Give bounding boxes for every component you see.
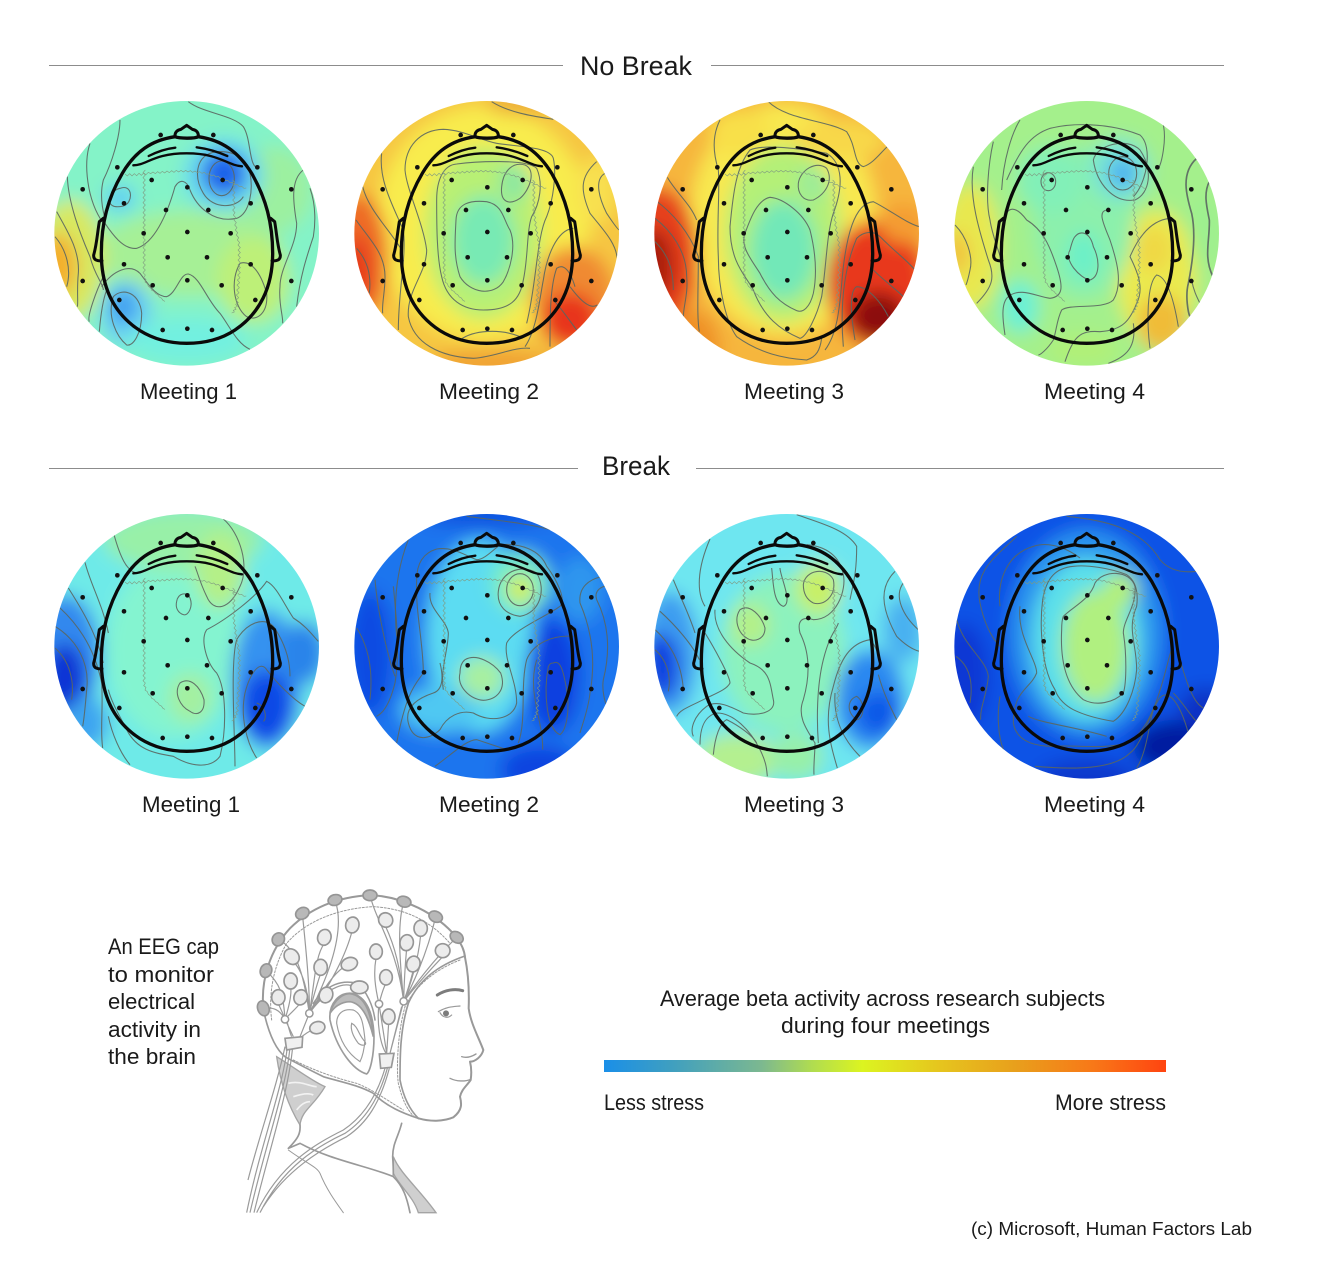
head outline and electrodes xyxy=(80,125,294,343)
contour lines xyxy=(356,102,619,358)
legend: stress colour scale xyxy=(604,1060,1166,1115)
colour field xyxy=(354,514,619,779)
copyright note: (c) Microsoft, Human Factors Lab xyxy=(971,1219,1252,1239)
text: EEG cap caption: to monitor xyxy=(108,962,214,987)
hair xyxy=(277,1057,436,1213)
colour field xyxy=(654,101,919,366)
contour lines xyxy=(55,519,318,766)
labels: Break meetings xyxy=(142,792,1145,817)
heat map: No Break, Meeting 3 xyxy=(654,101,919,366)
contour lines xyxy=(955,120,1213,363)
text: EEG cap caption: electrical xyxy=(108,989,195,1014)
text: chart description xyxy=(660,986,1105,1038)
colour field xyxy=(654,514,919,779)
labels: No Break meetings xyxy=(140,379,1145,404)
heat map: Break, Meeting 2 xyxy=(354,514,619,779)
heat map: No Break, Meeting 1 xyxy=(54,101,319,366)
labels: Break meetings: Meeting 3 xyxy=(744,792,844,817)
labels: Break meetings: Meeting 2 xyxy=(439,792,539,817)
contour lines xyxy=(55,102,315,349)
heat map: Break, Meeting 3 xyxy=(654,514,919,779)
contour lines xyxy=(655,515,919,776)
heat map: No Break, Meeting 4 xyxy=(954,101,1219,366)
cap and face outline xyxy=(263,895,483,1213)
labels: Break meetings: Meeting 1 xyxy=(142,792,240,817)
heading: No Break: No Break xyxy=(580,51,692,81)
heading: Break: Break xyxy=(602,451,670,481)
labels: No Break meetings: Meeting 4 xyxy=(1044,379,1145,404)
colour field xyxy=(954,514,1219,779)
contour lines xyxy=(956,516,1203,768)
heat map: Break, Meeting 1 xyxy=(54,514,319,779)
wires xyxy=(247,895,457,1213)
text: EEG cap caption xyxy=(108,934,219,1069)
colour field xyxy=(54,514,319,779)
heat map: No Break, Meeting 2 xyxy=(354,101,619,366)
head outline and electrodes xyxy=(80,533,294,751)
legend: stress colour scale: Less stress xyxy=(604,1090,704,1115)
head outline and electrodes xyxy=(680,125,894,343)
text: EEG cap caption: the brain xyxy=(108,1044,196,1069)
colour field xyxy=(54,101,319,366)
eye, brow, mouth xyxy=(437,990,476,1081)
contour lines xyxy=(655,102,919,360)
cap electrodes xyxy=(272,910,450,1035)
head outline and electrodes xyxy=(380,533,594,751)
text: EEG cap caption: An EEG cap xyxy=(108,934,219,959)
legend: stress colour scale: More stress xyxy=(1055,1090,1166,1115)
rim electrodes xyxy=(255,890,465,1017)
contour lines xyxy=(357,516,608,766)
head outline and electrodes xyxy=(680,533,894,751)
labels: Break meetings: Meeting 4 xyxy=(1044,792,1145,817)
junction rings xyxy=(281,998,407,1023)
text: chart description: Average beta activity across research subjects xyxy=(660,986,1105,1011)
head outline and electrodes xyxy=(380,125,594,343)
text: chart description: during four meetings xyxy=(781,1013,990,1038)
head outline and electrodes xyxy=(980,125,1194,343)
head outline and electrodes xyxy=(980,533,1194,751)
cable blocks xyxy=(285,1037,394,1068)
colour field xyxy=(354,101,619,366)
labels: No Break meetings: Meeting 2 xyxy=(439,379,539,404)
ear xyxy=(330,993,374,1074)
labels: No Break meetings: Meeting 3 xyxy=(744,379,844,404)
labels: No Break meetings: Meeting 1 xyxy=(140,379,237,404)
heat map: Break, Meeting 4 xyxy=(954,514,1219,779)
text: EEG cap caption: activity in xyxy=(108,1017,201,1042)
colour field xyxy=(954,101,1219,366)
illustration: woman wearing EEG cap xyxy=(247,890,483,1213)
